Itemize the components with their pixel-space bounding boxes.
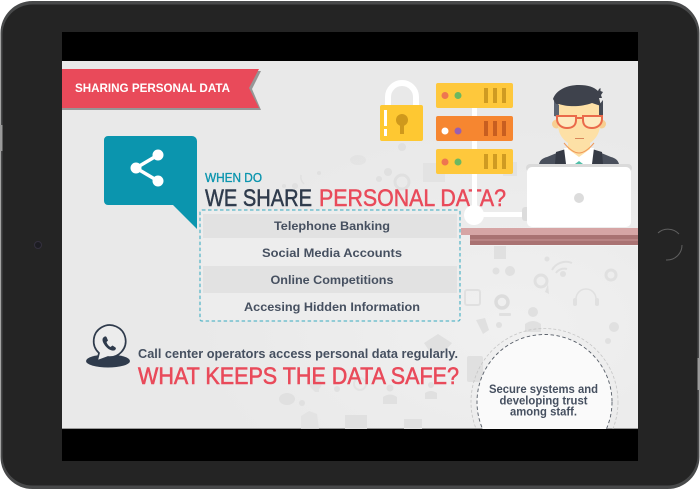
call center sentence: Call center operators access personal data regularly.	[138, 347, 458, 361]
answer text	[489, 384, 598, 418]
answer circle	[470, 328, 618, 429]
answer text: Secure systems and	[489, 384, 598, 396]
list box	[200, 210, 460, 321]
ears	[552, 120, 558, 128]
glasses	[557, 116, 602, 128]
server 1	[436, 83, 513, 108]
list item: Social Media Accounts	[262, 246, 402, 260]
desk	[461, 228, 638, 246]
server 3	[436, 149, 513, 174]
heading: we share personal data: PERSONAL DATA?	[319, 185, 506, 212]
share speech bubble	[104, 136, 197, 229]
list item: Telephone Banking	[274, 219, 390, 233]
server stack icon	[436, 83, 513, 174]
banner ribbon	[62, 69, 261, 110]
heading: we share personal data: WE SHARE	[205, 185, 312, 212]
heading: we share personal data	[204, 189, 506, 206]
faint background icons	[279, 143, 619, 429]
list item: Online Competitions	[270, 273, 394, 287]
answer text: among staff.	[510, 406, 577, 418]
list item: Accesing Hidden Information	[244, 300, 420, 314]
laptop	[526, 164, 632, 227]
server 2	[436, 116, 513, 141]
face and neck	[558, 100, 600, 157]
answer text: developing trust	[500, 396, 588, 408]
server connector lines	[464, 105, 530, 225]
home button	[658, 229, 682, 260]
padlock icon	[380, 83, 423, 141]
icon: share	[131, 150, 163, 186]
icon: phone speech bubble	[86, 325, 130, 368]
slide panel	[62, 61, 638, 429]
heading: what keeps the data safe: WHAT KEEPS THE DATA SAFE?	[138, 363, 459, 390]
front camera	[34, 242, 42, 248]
suit	[539, 153, 619, 164]
banner title: SHARING PERSONAL DATA	[75, 81, 230, 95]
heading: when do: WHEN DO	[205, 171, 262, 185]
black screen	[62, 32, 638, 461]
hair	[554, 100, 559, 117]
person with glasses	[539, 85, 619, 164]
